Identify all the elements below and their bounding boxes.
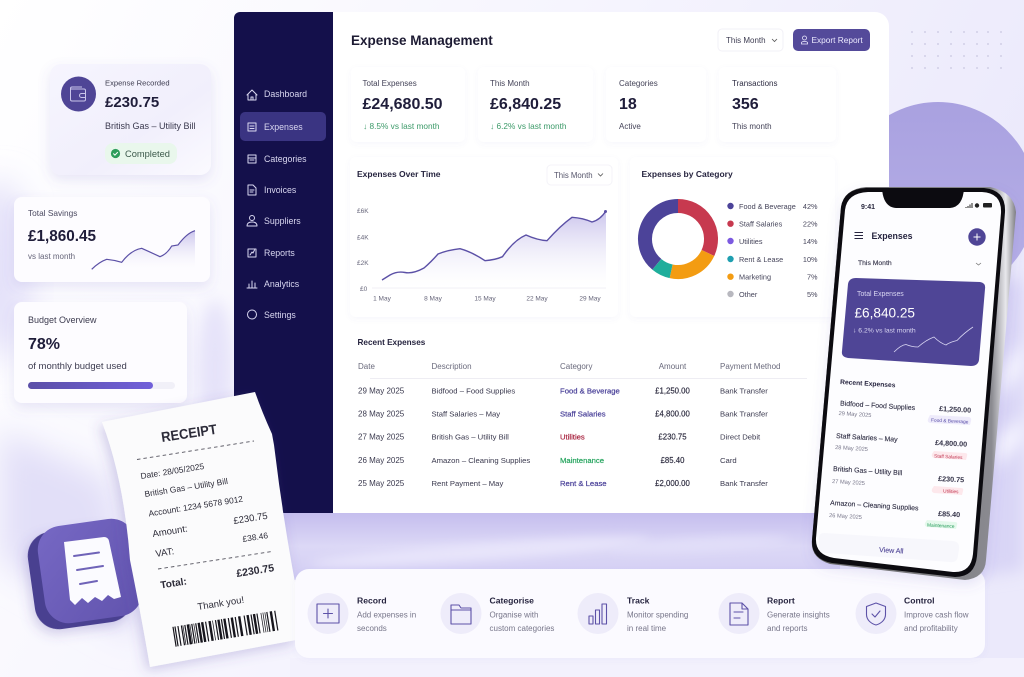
legend: 5% bbox=[807, 290, 818, 299]
receipt: £230.75 bbox=[233, 511, 268, 527]
line chart: expenses over time: 29 May bbox=[579, 296, 601, 302]
card: total savings: £1,860.45 bbox=[28, 228, 97, 245]
table: recent expenses: Bidfood – Food Supplies bbox=[432, 386, 515, 396]
panel: sidebar navigation: Suppliers bbox=[264, 216, 301, 226]
table: recent expenses: Category bbox=[560, 362, 592, 371]
phone summary card: Total Expenses bbox=[857, 291, 904, 298]
card: expense recorded: £230.75 bbox=[105, 94, 159, 111]
icon: suppliers bbox=[250, 216, 254, 220]
panel: features strip bbox=[295, 569, 985, 658]
stat card: categories bbox=[606, 67, 706, 142]
card: total savings: vs last month bbox=[28, 252, 75, 261]
stat card: this month bbox=[478, 67, 593, 142]
status: completed bbox=[105, 143, 177, 164]
receipt: Date: 28/05/2025 bbox=[140, 461, 205, 481]
phone screen bbox=[816, 192, 1001, 572]
line chart: expenses over time bbox=[350, 157, 618, 317]
legend: Staff Salaries bbox=[739, 220, 783, 229]
feature: report bbox=[718, 593, 830, 634]
table: recent expenses: Description bbox=[432, 362, 472, 371]
line chart: expenses over time: This Month bbox=[554, 171, 593, 180]
stat card: total expenses: ↓ 8.5% vs last month bbox=[363, 121, 440, 131]
line chart: expenses over time: £2K bbox=[357, 260, 369, 267]
legend bbox=[727, 202, 818, 299]
expense row: british gas: Utilities bbox=[943, 489, 959, 495]
expense row: bidfood bbox=[838, 401, 971, 425]
expense row: amazon: Maintenance bbox=[927, 523, 955, 530]
expense row: amazon bbox=[829, 500, 960, 530]
icon: suppliers body bbox=[247, 222, 257, 226]
feature: record bbox=[308, 593, 416, 634]
expense row: staff salaries bbox=[835, 433, 967, 461]
table: recent expenses: Maintenance bbox=[560, 456, 604, 465]
expense row: british gas: 27 May 2025 bbox=[832, 479, 865, 487]
feature: categorise bbox=[440, 593, 554, 634]
phone recent expenses bbox=[829, 379, 971, 530]
table: recent expenses: Staff Salaries bbox=[560, 410, 606, 418]
stat card: total expenses bbox=[351, 67, 465, 142]
icon: analytics bbox=[247, 281, 257, 288]
line chart: expenses over time: 22 May bbox=[526, 296, 548, 302]
line chart: expenses over time: £4K bbox=[357, 234, 369, 242]
table: recent expenses: Rent & Lease bbox=[560, 479, 607, 488]
table: recent expenses: 27 May 2025 bbox=[358, 432, 405, 442]
card: expense recorded bbox=[50, 64, 211, 175]
receipt: VAT: bbox=[155, 546, 175, 560]
phone header bbox=[854, 228, 986, 246]
table: recent expenses: £1,250.00 bbox=[655, 386, 691, 396]
expense row: amazon: Amazon – Cleaning Supplies bbox=[830, 500, 919, 512]
feature: categorise: custom categories bbox=[490, 624, 554, 633]
stat card: total expenses: Total Expenses bbox=[362, 79, 417, 88]
phone view all button bbox=[819, 533, 959, 562]
expense row: british gas: £230.75 bbox=[938, 474, 964, 484]
table: recent expenses: 25 May 2025 bbox=[358, 479, 405, 488]
expense row: bidfood: Bidfood – Food Supplies bbox=[840, 401, 916, 412]
icon: reports bbox=[248, 249, 256, 257]
expense row: staff salaries: Staff Salaries – May bbox=[836, 433, 898, 444]
icon: home bbox=[247, 90, 257, 100]
feature: control bbox=[856, 593, 969, 634]
icon: 3D receipt tile bbox=[25, 516, 145, 632]
legend: 22% bbox=[803, 220, 818, 229]
legend: 10% bbox=[803, 255, 818, 264]
icon: expenses bbox=[248, 123, 256, 131]
stat card: transactions: This month bbox=[732, 122, 772, 131]
legend: Utilities bbox=[739, 237, 763, 246]
notch bbox=[882, 188, 964, 208]
table: recent expenses: Staff Salaries – May bbox=[432, 410, 500, 418]
stat card: transactions: 356 bbox=[732, 96, 759, 113]
line chart: expenses over time: £6K bbox=[357, 208, 369, 215]
phone view all button: View All bbox=[879, 547, 904, 556]
table: recent expenses: Card bbox=[720, 456, 737, 465]
table: recent expenses: Bank Transfer bbox=[720, 410, 768, 418]
icon: categories bbox=[248, 155, 256, 163]
phone header: Expenses bbox=[872, 231, 913, 241]
receipt bbox=[102, 392, 297, 667]
phone dropdown bbox=[858, 260, 981, 267]
stat card: categories: Categories bbox=[619, 79, 658, 88]
feature: record: seconds bbox=[357, 624, 387, 633]
barcode bbox=[173, 611, 278, 647]
expense row: amazon: 26 May 2025 bbox=[829, 513, 862, 521]
line chart: expenses over time: 8 May bbox=[424, 296, 443, 302]
table: recent expenses: 29 May 2025 bbox=[358, 386, 405, 396]
legend: 14% bbox=[803, 237, 818, 246]
stat card: categories: Active bbox=[619, 122, 641, 131]
table: recent expenses: £85.40 bbox=[661, 456, 685, 465]
feature: categorise: Organise with bbox=[490, 610, 538, 620]
stat card: categories: 18 bbox=[619, 96, 637, 113]
receipt: £38.46 bbox=[242, 530, 269, 544]
legend: Marketing bbox=[739, 273, 771, 282]
card: budget overview: of monthly budget used bbox=[28, 361, 127, 372]
title: Expense Management bbox=[351, 33, 493, 48]
expense row: bidfood: Food & Beverage bbox=[931, 418, 969, 425]
card: budget overview bbox=[14, 302, 187, 403]
card: expense recorded: British Gas – Utility Bill bbox=[105, 121, 196, 131]
button: export report: Export Report bbox=[812, 35, 863, 45]
expense row: staff salaries: 28 May 2025 bbox=[835, 445, 868, 453]
feature: track: Monitor spending bbox=[627, 610, 688, 620]
panel: sidebar navigation bbox=[234, 12, 333, 513]
phone summary card bbox=[842, 278, 985, 366]
legend: 7% bbox=[807, 273, 818, 282]
expense row: british gas bbox=[832, 466, 964, 495]
table: recent expenses bbox=[358, 338, 807, 488]
phone frame bbox=[812, 187, 1016, 580]
phone mockup bbox=[812, 187, 1016, 580]
feature: record: Add expenses in bbox=[357, 610, 416, 620]
dot grid bbox=[911, 31, 1002, 69]
icon: settings bbox=[248, 310, 256, 319]
table: recent expenses: £4,800.00 bbox=[655, 410, 691, 418]
dropdown: this month: This Month bbox=[726, 36, 766, 45]
receipt: Thank you! bbox=[197, 595, 245, 613]
stat card: transactions: Transactions bbox=[732, 79, 778, 88]
line chart: expenses over time: Expenses Over Time bbox=[357, 169, 441, 179]
phone summary card: ↓ 6.2% vs last month bbox=[853, 328, 916, 334]
card: budget overview: Budget Overview bbox=[28, 315, 97, 325]
card: total savings bbox=[14, 197, 210, 282]
table: recent expenses: 26 May 2025 bbox=[358, 456, 405, 465]
receipt: £230.75 bbox=[236, 562, 275, 580]
feature: track bbox=[578, 593, 688, 634]
legend: 42% bbox=[803, 202, 818, 211]
feature: control: Improve cash flow bbox=[904, 610, 969, 620]
feature: track: Track bbox=[627, 596, 650, 606]
decorative circle bbox=[840, 102, 1024, 298]
stat card: this month: This Month bbox=[490, 79, 530, 88]
table: recent expenses: Bank Transfer bbox=[720, 386, 768, 396]
expense row: bidfood: 29 May 2025 bbox=[838, 411, 872, 419]
donut chart: expenses by category: Expenses by Category bbox=[642, 169, 733, 179]
feature: report: Report bbox=[767, 596, 795, 606]
card: total savings: Total Savings bbox=[28, 208, 77, 218]
feature: report: and reports bbox=[767, 624, 807, 633]
line chart: expenses over time: 1 May bbox=[373, 296, 392, 302]
table: recent expenses: Amount bbox=[659, 362, 687, 371]
feature: report: Generate insights bbox=[767, 610, 830, 620]
table: recent expenses: Amazon – Cleaning Supplies bbox=[432, 456, 530, 465]
panel: sidebar navigation: Categories bbox=[264, 154, 307, 164]
phone dropdown: This Month bbox=[858, 260, 892, 267]
panel: sidebar navigation: Settings bbox=[264, 310, 296, 320]
icon: invoices bbox=[248, 185, 256, 195]
table: recent expenses: Direct Debit bbox=[720, 432, 761, 442]
legend: Other bbox=[739, 290, 758, 299]
card: budget overview: 78% bbox=[28, 336, 60, 353]
table: recent expenses: £230.75 bbox=[658, 432, 687, 442]
panel: sidebar navigation: Dashboard bbox=[264, 89, 307, 99]
receipt: Total: bbox=[160, 576, 188, 591]
expense row: amazon: £85.40 bbox=[938, 509, 960, 519]
table: recent expenses: British Gas – Utility Bill bbox=[432, 432, 509, 442]
receipt: Account: 1234 5678 9012 bbox=[148, 494, 244, 518]
feature: categorise: Categorise bbox=[490, 596, 534, 606]
button: export report bbox=[793, 29, 870, 51]
stat card: this month: £6,840.25 bbox=[490, 96, 561, 113]
table: recent expenses: Bank Transfer bbox=[720, 479, 768, 488]
table: recent expenses: Food & Beverage bbox=[560, 386, 620, 396]
panel: sidebar navigation: Analytics bbox=[264, 279, 300, 289]
expense row: british gas: British Gas – Utility Bill bbox=[833, 466, 903, 477]
stat card: total expenses: £24,680.50 bbox=[362, 96, 443, 113]
receipt: Amount: bbox=[152, 524, 188, 540]
panel: sidebar navigation: Invoices bbox=[264, 185, 297, 195]
icon: wallet bbox=[61, 76, 96, 112]
feature: track: in real time bbox=[627, 624, 667, 633]
stat card: transactions bbox=[719, 67, 836, 142]
expense row: staff salaries: £4,800.00 bbox=[935, 438, 967, 449]
table: recent expenses: Recent Expenses bbox=[358, 338, 426, 347]
panel: dashboard bbox=[234, 12, 889, 513]
feature: control: Control bbox=[904, 596, 935, 606]
status bar bbox=[861, 203, 992, 211]
table: recent expenses: 28 May 2025 bbox=[358, 410, 405, 418]
heading: RECEIPT bbox=[160, 421, 218, 445]
card: expense recorded: Expense Recorded bbox=[105, 78, 170, 88]
phone summary card: £6,840.25 bbox=[854, 306, 915, 320]
legend: Rent & Lease bbox=[739, 255, 783, 264]
table: recent expenses: Date bbox=[358, 362, 375, 371]
feature: control: and profitability bbox=[904, 624, 958, 633]
table: recent expenses: Payment Method bbox=[720, 362, 780, 371]
expense row: staff salaries: Staff Salaries bbox=[934, 454, 963, 461]
status bar: 9:41 bbox=[861, 204, 875, 211]
panel: sidebar navigation: Expenses bbox=[264, 122, 303, 132]
panel: sidebar navigation: Reports bbox=[264, 248, 295, 258]
receipt: British Gas – Utility Bill bbox=[144, 476, 229, 499]
phone recent expenses: Recent Expenses bbox=[840, 379, 896, 389]
legend: Food & Beverage bbox=[739, 202, 796, 211]
sparkline bbox=[92, 231, 195, 270]
table: recent expenses: £2,000.00 bbox=[655, 479, 691, 488]
stat card: this month: ↓ 6.2% vs last month bbox=[490, 121, 567, 131]
feature: record: Record bbox=[357, 596, 387, 606]
dropdown: this month bbox=[718, 29, 783, 51]
table: recent expenses: Utilities bbox=[560, 432, 585, 442]
table: recent expenses: Rent Payment – May bbox=[432, 479, 503, 488]
line chart: expenses over time: £0 bbox=[360, 286, 368, 293]
line chart: expenses over time: 15 May bbox=[474, 296, 496, 302]
expense row: bidfood: £1,250.00 bbox=[939, 404, 971, 415]
status: completed: Completed bbox=[125, 149, 170, 159]
donut chart: expenses by category bbox=[630, 157, 835, 317]
